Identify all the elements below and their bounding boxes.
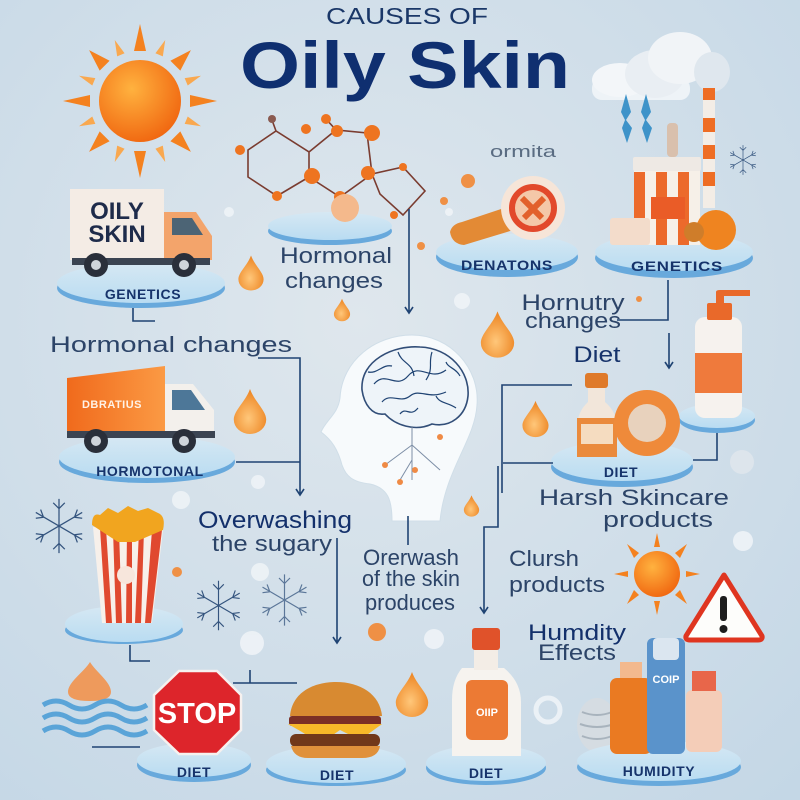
text: ormita: ormita [490,142,557,161]
text: hormonal changes left: Hormonal changes [50,332,292,357]
text: clursh products [509,546,605,597]
text: hormutry changes: Hornutry [522,290,624,315]
icon: small sun [614,533,700,615]
product on platform: genetics right [595,88,753,278]
product on platform: diet right: DIET [604,464,638,480]
text: humidity effects: Effects [538,640,616,665]
icon: stop sign platform [137,671,251,782]
text: overwashing the sugary: the sugary [212,531,332,556]
truck: hormonal [59,366,235,483]
truck: hormonal: HORMOTONAL [96,463,204,479]
icon: stop sign platform: DIET [177,764,211,780]
product on platform: denatons: DENATONS [461,257,553,273]
text: hormonal changes center: Hormonal [280,243,392,268]
bottle platform [426,628,546,785]
icon: snow decoration top right [730,145,756,175]
product on platform: diet right [551,373,693,487]
products platform humidity: COIP [653,674,679,686]
truck: oily skin: OILY [90,198,144,225]
text: overwash of the skin produces: produces [365,590,455,615]
icon: snowflake left [36,499,82,553]
truck: hormonal: DBRATIUS [82,399,142,411]
text: overwash of the skin produces: Orerwash [363,545,459,570]
text: overwash of the skin produces: of the skin [362,566,460,591]
connector arrows [92,209,717,747]
product on platform: denatons [436,176,578,277]
text: hormutry changes [522,290,624,333]
text: hormutry changes: changes [525,308,621,333]
text: overwashing the sugary [198,507,352,556]
truck: oily skin [57,189,225,308]
icon: molecule [235,114,425,245]
text: changes center: changes [285,268,383,293]
burger platform [266,682,406,786]
text: diet right: Diet [574,342,620,367]
text: harsh skincare products: products [603,507,713,532]
text: humidity effects [528,620,626,665]
bottle platform: DIET [469,765,503,781]
head with brain [321,335,477,521]
title: CAUSES OF [326,3,488,29]
icon: sun top left [63,24,217,178]
text: overwashing the sugary: Overwashing [198,507,352,534]
product on platform: genetics right: GENETICS [631,258,723,274]
bottle platform: OIIP [476,707,498,719]
icon: snowflakes centre [197,574,306,630]
title [240,3,570,102]
text: clursh products: Clursh [509,546,579,571]
icon: waves [43,701,147,735]
orange dots [172,174,642,641]
text: overwash of the skin produces [362,545,460,615]
icon: warning triangle [686,575,762,640]
decorative bubbles [172,207,754,722]
drops scattered [68,256,549,717]
text: humidity effects: Humdity [528,620,626,645]
title: Oily Skin [240,28,570,102]
burger platform: DIET [320,767,354,783]
truck: oily skin: SKIN [88,221,146,248]
icon: shell [577,698,617,752]
products platform humidity [577,638,741,786]
icon: stop sign platform: STOP [158,698,236,730]
bottle right [679,290,755,433]
text: clursh products: products [509,572,605,597]
text: harsh skincare products [539,485,729,532]
truck: oily skin: GENETICS [105,286,181,302]
clouds and rain [592,32,730,143]
products platform humidity: HUMIDITY [623,763,695,779]
text: harsh skincare products: Harsh Skincare [539,485,729,510]
fries [65,506,183,644]
